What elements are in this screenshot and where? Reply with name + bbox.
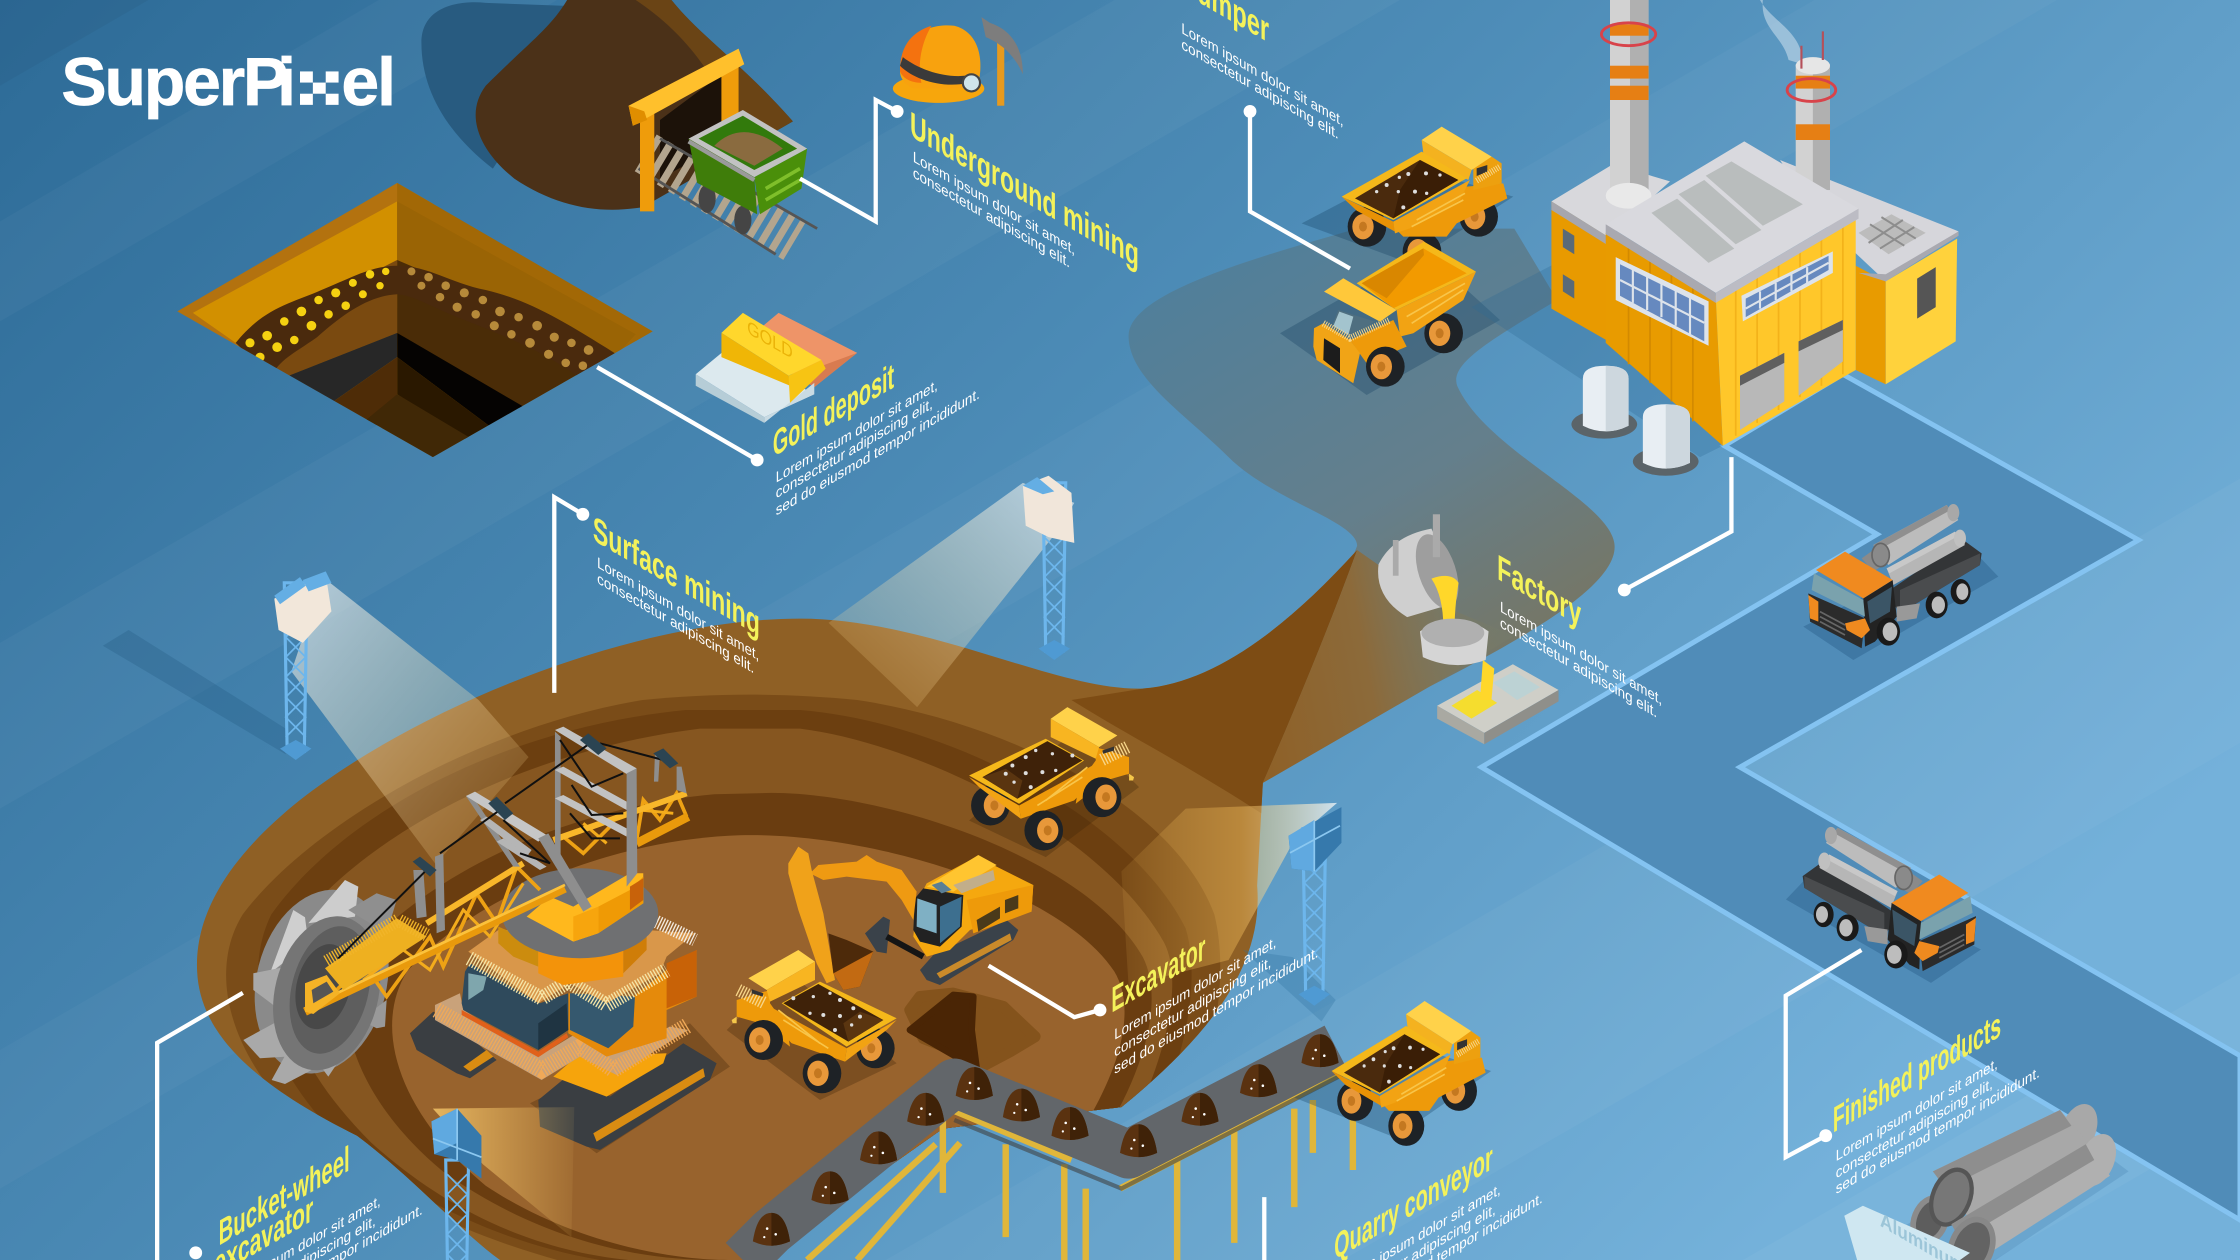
open pit (186, 543, 1371, 1260)
pipes: shadow (1900, 1129, 2129, 1260)
hydraulic: body (913, 855, 1033, 957)
pipes: lower (1942, 1128, 2123, 1260)
finished goods road (1481, 374, 2240, 1220)
leader: factory (1618, 457, 1731, 596)
leader: finished (1786, 950, 1861, 1157)
logo (61, 45, 394, 120)
pit: floor (392, 835, 1125, 1260)
factory (1471, 0, 1959, 476)
haul road (1129, 229, 1615, 783)
label: excavator: consectetur adipiscing elit, (1114, 953, 1271, 1061)
label: factory (1497, 547, 1662, 722)
label: finished products: consectetur adipiscing elit, (1836, 1075, 1993, 1183)
light tower: back (829, 476, 1074, 707)
label: gold deposit: Gold deposit (773, 355, 894, 465)
label: excavator: Excavator (1111, 927, 1206, 1021)
label: factory: consectetur adipiscing elit. (1500, 614, 1657, 722)
factory: main roof (1606, 141, 1859, 303)
bar: gold: GOLD (747, 316, 793, 363)
excavator: cabin glass (462, 963, 635, 1057)
excavator: deck railing (469, 922, 695, 1005)
hydraulic: far track (865, 917, 890, 953)
excavator: walkway (305, 918, 427, 1014)
pipe truck: top (1803, 504, 1998, 660)
pit: dark ledge (258, 710, 1192, 1260)
ladle: crucible (1378, 514, 1467, 617)
factory: main left wall (1606, 233, 1723, 446)
label: gold deposit: Lorem ipsum dolor sit amet, (776, 376, 938, 487)
factory: tall chimney (1601, 0, 1656, 209)
leader: surface (554, 497, 589, 693)
excavator: wheel teeth (243, 880, 397, 1084)
icon: aluminum ingots (1844, 1206, 1970, 1260)
mine: tunnel (660, 74, 721, 179)
excavator: leaning frame (413, 792, 592, 933)
label: factory: Lorem ipsum dolor sit amet, (1500, 598, 1662, 709)
conveyor: ore piles (753, 1034, 1339, 1246)
pit: neck ledge (1071, 550, 1357, 814)
label: bucket-wheel excavator: Bucket-wheel (219, 1138, 350, 1254)
light tower: front (431, 1107, 574, 1260)
factory: right annex (1780, 160, 1959, 384)
hydraulic: cab (913, 882, 963, 947)
bar: silver (696, 347, 814, 423)
label: quarry conveyor (1334, 1137, 1543, 1260)
bar: bronze (743, 313, 857, 387)
quarry conveyor (743, 1034, 1357, 1260)
dump truck: upper loaded (1302, 127, 1513, 272)
ladle: cup (1420, 619, 1494, 700)
logo: i (277, 45, 294, 120)
label: finished products: Finished products (1833, 1004, 2001, 1141)
label: underground mining (910, 104, 1139, 276)
factory: short chimney (1787, 31, 1836, 190)
logo: pixel x (300, 71, 339, 105)
pit: second terrace (226, 695, 1220, 1260)
hydraulic: bucket (828, 933, 873, 990)
bar: gold (721, 313, 826, 403)
label: surface mining: consectetur adipiscing elit. (597, 570, 754, 678)
leader: bucket (157, 993, 243, 1260)
factory: smoke (1760, 0, 1803, 64)
light tower: left (103, 571, 529, 864)
ladle: mold (1437, 664, 1559, 744)
dump truck: conveyor (1294, 1001, 1491, 1146)
pit: middle ledge (284, 729, 1172, 1260)
factory: right tank (1633, 404, 1699, 476)
pipe truck: bottom (1786, 827, 1981, 983)
excavator: mast block (527, 873, 643, 942)
underground mine (421, 0, 817, 254)
excavator: turntable (502, 868, 658, 958)
bucket-wheel excavator (236, 727, 730, 1153)
pipes: upper (1924, 1098, 2105, 1231)
deposit: right wall (364, 183, 653, 460)
neck blend (1263, 550, 1514, 783)
label: gold deposit: consectetur adipiscing elit, (776, 395, 933, 503)
icon: helmet (893, 25, 984, 103)
light tower: right (1121, 803, 1341, 1021)
hydraulic excavator (788, 847, 1033, 990)
excavator: house walls (568, 950, 697, 1057)
mine: timber frame (629, 49, 744, 211)
mine: hill (476, 0, 793, 210)
icon: finished pipes (1900, 1098, 2129, 1260)
conveyor: belt (743, 1047, 1336, 1260)
pit: muck hole (910, 993, 1035, 1068)
excavator: cables (338, 740, 663, 958)
excavator: drum (498, 927, 647, 985)
leader: gold (597, 367, 764, 466)
leader: underground (800, 100, 904, 221)
pit: inner ledge (346, 793, 1152, 1260)
pit: outer rim (186, 543, 1371, 1260)
label: finished products (1833, 1004, 2040, 1198)
label: dumper: consectetur adipiscing elit. (1181, 36, 1339, 143)
label: bucket-wheel excavator (214, 1138, 423, 1260)
label: factory: Factory (1497, 547, 1581, 635)
leader: excavator (989, 966, 1106, 1017)
deposit: left wall (177, 183, 433, 457)
label: underground mining: consectetur adipiscing elit. (913, 164, 1070, 272)
excavator: ground shadow (530, 1023, 730, 1153)
logo: el (341, 45, 394, 120)
label: surface mining: Surface mining (593, 508, 760, 644)
factory: roll-up doors (1740, 320, 1843, 430)
label: gold deposit: sed do eiusmod tempor incididunt. (776, 385, 980, 520)
mine: hill shadow (421, 2, 600, 169)
gold deposit cross-section (177, 183, 653, 460)
label: excavator: Lorem ipsum dolor sit amet, (1114, 933, 1276, 1044)
factory: left tank (1571, 366, 1637, 439)
label: dumper: Lorem ipsum dolor sit amet, (1181, 20, 1343, 130)
factory: main right wall (1716, 217, 1856, 446)
logo: SuperP (61, 45, 286, 120)
dump truck: loaded left (727, 950, 897, 1100)
excavator: bottom block (553, 1053, 667, 1097)
label: underground mining: Lorem ipsum dolor sit amet, (913, 148, 1075, 259)
excavator: wheel back ring (236, 875, 407, 1088)
hydraulic: near track (920, 920, 1018, 985)
factory: left windows (1616, 257, 1709, 346)
mine: cart (689, 110, 807, 234)
mine: rails (639, 139, 817, 254)
excavator: upper deck (468, 930, 695, 1003)
hydraulic: arm (788, 847, 835, 983)
ladle: molten stream (1431, 576, 1459, 640)
excavator: boom (305, 793, 688, 1012)
hydraulic: boom (810, 855, 917, 920)
excavator: lower deck (435, 993, 688, 1080)
excavator: wheel disc (258, 905, 396, 1082)
deposit: gold vein (236, 266, 614, 377)
icon: smelting ladle and mold (1378, 514, 1559, 744)
hydraulic: undercarriage (887, 937, 923, 957)
factory: ground shadow (1471, 236, 1723, 457)
conveyor: back frame (807, 1066, 1356, 1260)
excavator: front track (538, 1043, 717, 1150)
icon: pickaxe (981, 17, 1023, 106)
excavator: pulleys (413, 733, 678, 877)
leader: quarry (1263, 1197, 1266, 1260)
dump truck: upper empty (1280, 242, 1500, 395)
label: finished products: Lorem ipsum dolor sit amet, (1836, 1055, 1998, 1165)
factory: left annex (1551, 164, 1670, 341)
pipes: back (1907, 1193, 1953, 1247)
excavator: upright frame (555, 727, 687, 887)
label: surface mining: Lorem ipsum dolor sit amet, (597, 554, 759, 665)
icon: metal bars (696, 313, 857, 423)
label: excavator: sed do eiusmod tempor incididunt. (1114, 943, 1318, 1078)
dump truck: in pit right (969, 707, 1139, 857)
label: underground mining: Underground mining (910, 104, 1139, 276)
label: finished products: sed do eiusmod tempor incididunt. (1836, 1063, 2040, 1198)
leader: dumper (1244, 105, 1350, 269)
factory: right windows (1741, 251, 1833, 321)
excavator: back track (410, 1012, 497, 1078)
